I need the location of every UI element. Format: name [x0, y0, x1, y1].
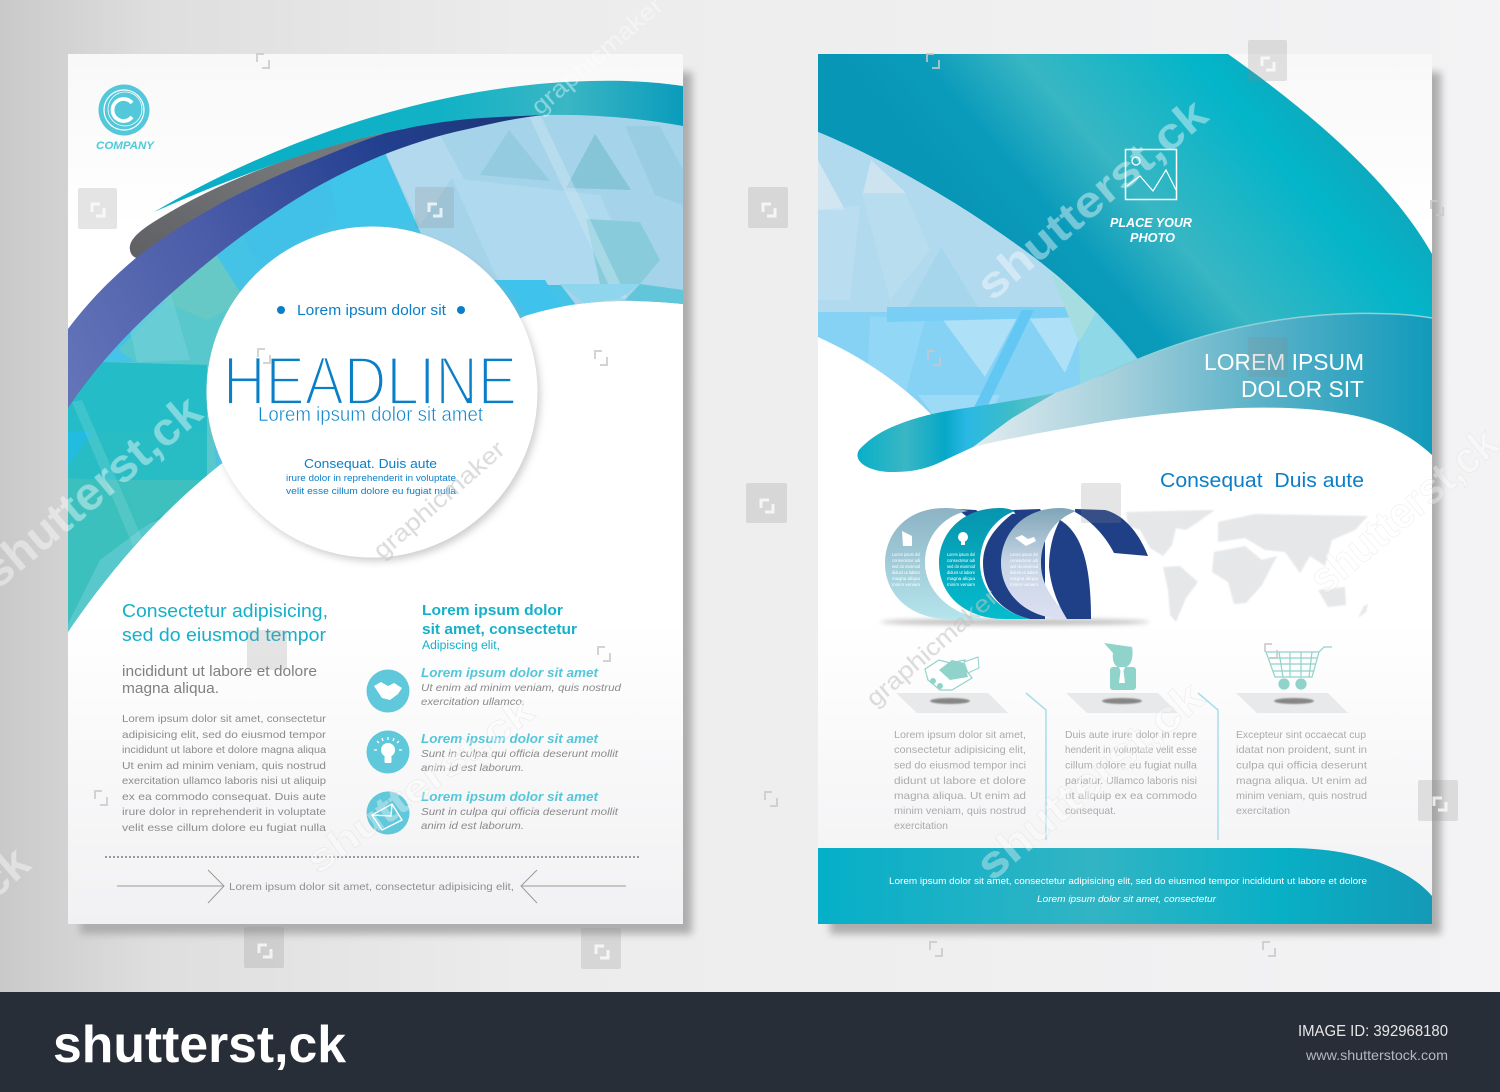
ring two: minim veniam — [947, 582, 976, 587]
panel: left page cover — [60, 54, 692, 934]
list item: handshake — [366, 665, 622, 712]
left column text: Consectetur adipisicing, — [122, 600, 328, 621]
ring one: minim veniam — [892, 582, 921, 587]
list item: light bulb: Lorem ipsum dolor sit amet — [421, 731, 599, 746]
left column text: velit esse cillum dolore eu fugiat nulla — [122, 822, 326, 834]
geometric triangle band — [818, 132, 1138, 420]
column text three: idatat non proident, sunt in — [1236, 744, 1367, 756]
list item: light bulb — [366, 730, 619, 774]
watermark text over colour: graphicmaker — [526, 0, 668, 121]
left column text: incididunt ut labore et dolore magna aliqua — [122, 744, 326, 756]
left column text: ex ea commodo consequat. Duis aute — [122, 791, 326, 803]
right column heading: sit amet, consectetur — [422, 622, 577, 638]
headline circle: velit esse cillum dolore eu fugiat nulla — [286, 486, 456, 496]
ring three: Lorem ipsum dol — [1010, 552, 1038, 557]
left column text: incididunt ut labore et dolore — [122, 663, 317, 680]
bottom credit bar: IMAGE ID: 392968180 — [1298, 1023, 1448, 1040]
ribbon title: DOLOR SIT — [1241, 376, 1364, 402]
column text two: consequat. — [1065, 805, 1116, 817]
section heading: Consequat Duis aute — [1160, 469, 1364, 492]
column text two — [1065, 729, 1197, 817]
ring two: Lorem ipsum dol — [947, 552, 975, 557]
ring two: sed do eiusmod — [947, 564, 976, 569]
ring one: consectetur adi — [892, 558, 920, 563]
panel: right page back — [818, 54, 1441, 934]
left column text: adipisicing elit, sed do eiusmod tempor — [122, 729, 327, 741]
column text three: magna aliqua. Ut enim ad — [1236, 775, 1367, 787]
watermark maker text: graphicmaker — [861, 584, 1003, 713]
column text one: sed do eiusmod tempor inci — [894, 760, 1026, 772]
watermark maker text — [368, 436, 1003, 713]
geometric triangle band — [60, 100, 690, 650]
place your photo icon — [1110, 150, 1192, 245]
icon platforms — [896, 693, 1348, 713]
ring one: sed do eiusmod — [892, 564, 921, 569]
icon: shopping cart — [1266, 647, 1332, 689]
watermark text over colour — [0, 0, 1217, 908]
column text one: didunt ut labore et dolore — [894, 775, 1026, 787]
column text three: minim veniam, quis nostrud — [1236, 790, 1367, 802]
ring two — [939, 508, 1050, 619]
grey swoosh — [130, 129, 403, 259]
watermark text over white: shutterst,ck — [299, 689, 543, 882]
ring three: minim veniam — [1010, 582, 1039, 587]
headline circle: Lorem ipsum dolor sit — [297, 302, 447, 319]
list item: light bulb: anim id est laborum. — [421, 762, 524, 774]
column text one: minim veniam, quis nostrud — [894, 805, 1026, 817]
watermark marks — [92, 58, 1446, 958]
teal cover shape — [818, 54, 1432, 362]
left column text: sed do eiusmod tempor — [122, 624, 326, 645]
watermark maker text: graphicmaker — [368, 436, 510, 565]
watermark outlines — [95, 54, 1443, 956]
list item: handshake: Lorem ipsum dolor sit amet — [421, 665, 599, 680]
headline circle: Consequat. Duis aute — [304, 457, 437, 471]
watermark text over white: shutterst,ck — [967, 672, 1213, 890]
column text two: pariatur. Ullamco laboris nisi — [1065, 775, 1197, 787]
icon: handshake — [925, 657, 979, 690]
ring one — [885, 508, 990, 619]
left column text: Ut enim ad minim veniam, quis nostrud — [122, 760, 326, 772]
ring one: magna aliqua — [892, 576, 921, 581]
ribbon title — [1204, 349, 1364, 402]
world map — [1126, 510, 1368, 622]
right column heading: Lorem ipsum dolor — [422, 603, 563, 619]
headline circle: HEADLINE — [223, 342, 517, 420]
left page sheet — [68, 54, 683, 924]
right page sheet — [818, 54, 1432, 924]
bottom credit bar — [0, 992, 1500, 1092]
ring three: magna aliqua — [1010, 576, 1039, 581]
headline circle: Lorem ipsum dolor sit amet — [258, 404, 483, 426]
footer band: Lorem ipsum dolor sit amet, consectetur adipisicing elit, sed do eiusmod tempor incididunt ut labore et dolore — [889, 876, 1367, 887]
column text two: Duis aute irure dolor in repre — [1065, 729, 1197, 741]
list item: handshake: Ut enim ad minim veniam, quis nostrud — [421, 682, 622, 694]
ring two: magna aliqua — [947, 576, 976, 581]
company logo — [96, 84, 156, 152]
list item: envelope — [366, 789, 619, 834]
footer line with arrows — [117, 870, 626, 903]
list item: envelope: Sunt in culpa qui officia deserunt mollit — [421, 806, 619, 818]
bottom credit bar: shutterst,ck — [53, 1016, 346, 1074]
watermark text over white — [299, 418, 1500, 890]
column text two: cillum dolore eu fugiat nulla — [1065, 760, 1197, 772]
right page shadow — [830, 72, 1441, 934]
column text one: magna aliqua. Ut enim ad — [894, 790, 1026, 802]
watermark squares — [78, 40, 1458, 969]
navy swoosh — [68, 115, 546, 408]
icon: businessman — [1104, 643, 1136, 690]
ring diagram — [880, 508, 1150, 626]
swoosh tip — [857, 393, 1055, 472]
column text one — [894, 729, 1026, 832]
list item: light bulb: Sunt in culpa qui officia deserunt mollit — [421, 748, 619, 760]
ring three: sed do eiusmod — [1010, 564, 1039, 569]
ribbon title: LOREM IPSUM — [1204, 349, 1364, 375]
footer band — [818, 848, 1432, 924]
ring one: didunt ut labore — [892, 570, 921, 575]
left column text: magna aliqua. — [122, 680, 219, 697]
company logo: COMPANY — [96, 140, 156, 152]
column text three: exercitation — [1236, 805, 1290, 817]
left column text: exercitation ullamco laboris nisi ut aliquip — [122, 775, 326, 787]
left page shadow — [80, 72, 692, 934]
footer line with arrows: Lorem ipsum dolor sit amet, consectetur adipisicing elit, — [229, 881, 514, 893]
swoosh ribbon — [932, 313, 1432, 465]
list item: envelope: Lorem ipsum dolor sit amet — [421, 789, 599, 804]
footer band: Lorem ipsum dolor sit amet, consectetur — [1037, 894, 1217, 905]
headline circle: irure dolor in reprehenderit in voluptate — [286, 473, 456, 483]
column text three: Excepteur sint occaecat cup — [1236, 729, 1366, 741]
teal top band — [154, 81, 683, 212]
place your photo icon: PLACE YOUR — [1110, 216, 1192, 230]
column text one: Lorem ipsum dolor sit amet, — [894, 729, 1026, 741]
column text one: consectetur adipisicing elit, — [894, 744, 1026, 756]
column text one: exercitation — [894, 820, 948, 832]
left column text — [122, 600, 328, 834]
list item: envelope: anim id est laborum. — [421, 820, 524, 832]
ring one: Lorem ipsum dol — [892, 552, 920, 557]
ring three: didunt ut labore — [1010, 570, 1039, 575]
ring three — [1001, 508, 1148, 619]
column text two: henderit in voluptate velit esse — [1065, 744, 1197, 756]
left column text: irure dolor in reprehenderit in voluptate — [122, 806, 326, 818]
ring three: consectetur adi — [1010, 558, 1038, 563]
ring two: didunt ut labore — [947, 570, 976, 575]
headline circle — [206, 226, 540, 561]
place your photo icon: PHOTO — [1130, 231, 1175, 245]
column text three: culpa qui officia deserunt — [1236, 760, 1367, 772]
column text three — [1236, 729, 1367, 817]
right column heading: Adipiscing elit, — [422, 640, 500, 652]
bottom credit bar: www.shutterstock.com — [1305, 1047, 1448, 1063]
column text two: ut aliquip ex ea commodo — [1065, 790, 1197, 802]
list item: handshake: exercitation ullamco. — [421, 696, 525, 708]
ring two: consectetur adi — [947, 558, 975, 563]
right column heading — [422, 603, 577, 652]
watermark text over colour: shutterst,ck — [967, 89, 1217, 310]
left column text: Lorem ipsum dolor sit amet, consectetur — [122, 713, 327, 725]
